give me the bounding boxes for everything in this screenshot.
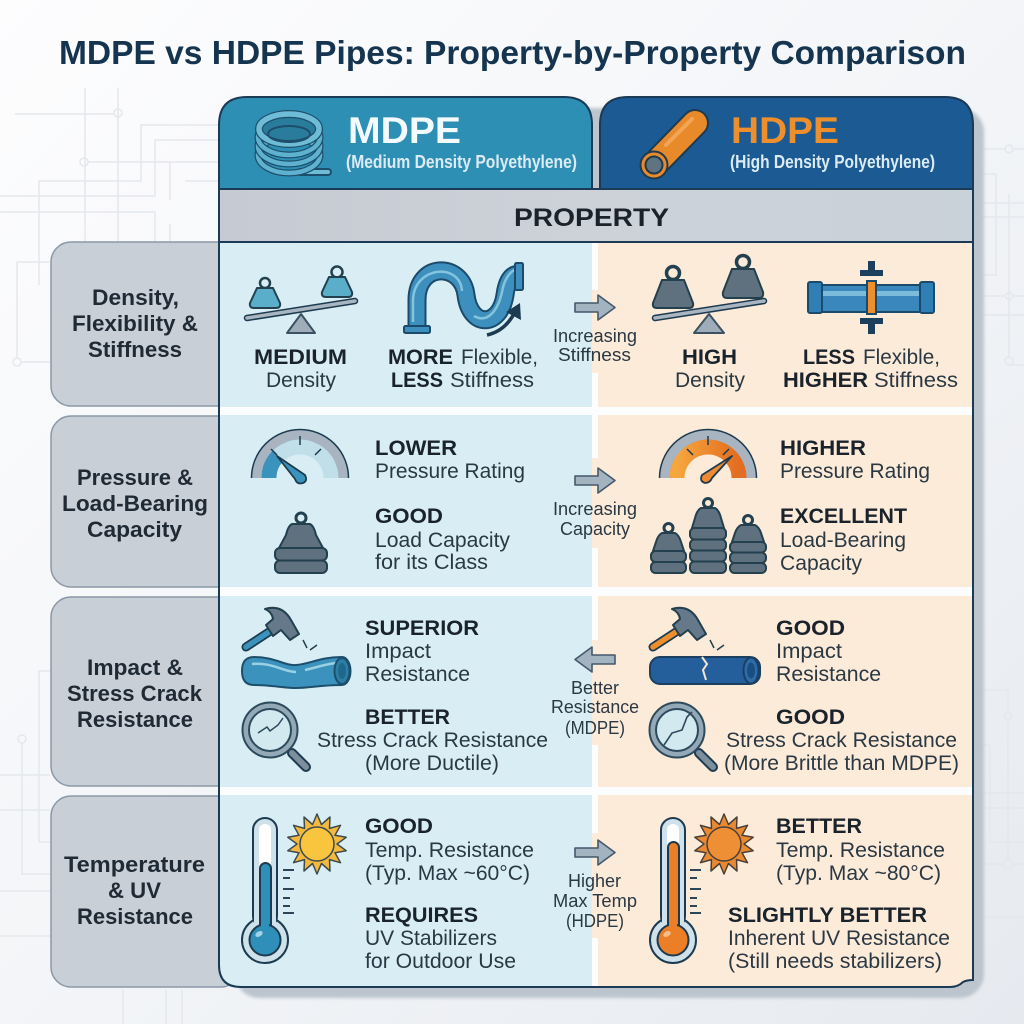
text: better stress crack resistance: (More Ductile) <box>365 752 499 775</box>
icon: coiled pipe <box>258 114 328 173</box>
row label: temperature and UV resistance: & UV <box>108 878 161 903</box>
arrow caption: Stiffness <box>558 345 631 365</box>
text: more flexible, less stiffness: Stiffness <box>450 369 534 392</box>
arrow caption: Resistance <box>551 697 639 717</box>
icon: hammer and cracked pipe <box>650 608 760 684</box>
icon: balance with heavy weights <box>653 256 764 333</box>
text: good stress crack resistance: Stress Crack Resistance <box>726 729 957 752</box>
icon: high pressure gauge <box>665 435 751 483</box>
text: good load capacity: GOOD <box>375 505 443 528</box>
icon: hammer and bent pipe <box>242 608 350 688</box>
text: less flexible, higher stiffness: Stiffness <box>874 369 958 392</box>
text: better temp resistance: Temp. Resistance <box>776 839 945 862</box>
icon: balance with light weights <box>247 266 355 333</box>
icon: magnifier over larger crack <box>650 702 713 767</box>
text: more flexible, less stiffness: MORE <box>388 346 453 369</box>
arrow caption: Capacity <box>560 519 630 539</box>
table body cells <box>219 243 973 987</box>
text: less flexible, higher stiffness: Flexible, <box>863 346 940 369</box>
row label: impact and stress crack resistance: Resistance <box>77 707 193 732</box>
header: MDPE <box>219 97 592 189</box>
text: good impact resistance <box>776 617 881 686</box>
text: less flexible, higher stiffness: LESS <box>803 346 855 369</box>
row 2 MDPE: pressure and load <box>257 435 525 574</box>
text: superior impact resistance <box>365 617 479 686</box>
text: lower pressure rating: LOWER <box>375 437 457 460</box>
text: good temp resistance: (Typ. Max ~60°C) <box>365 862 530 885</box>
icon: single weight <box>275 513 327 573</box>
text: slightly better UV resistance: (Still needs stabilizers) <box>728 950 942 973</box>
text: good stress crack resistance <box>724 706 959 775</box>
row label: density, flexibility and stiffness: Stiffness <box>88 337 182 362</box>
text: higher pressure rating <box>780 437 930 483</box>
table outline <box>219 189 973 987</box>
icon: magnifier over crack <box>242 702 306 767</box>
text: excellent load-bearing capacity <box>780 505 907 575</box>
text: medium density <box>254 346 347 392</box>
text: lower pressure rating: Pressure Rating <box>375 460 525 483</box>
text: requires UV stabilizers <box>365 904 516 973</box>
text: good stress crack resistance: (More Brittle than MDPE) <box>724 752 959 775</box>
text: better stress crack resistance: Stress Crack Resistance <box>317 729 548 752</box>
icon: low pressure gauge <box>257 435 343 484</box>
text: excellent load-bearing capacity: Load-Bearing <box>780 529 906 552</box>
text: slightly better UV resistance: Inherent UV Resistance <box>728 927 950 950</box>
text: medium density: Density <box>266 369 336 392</box>
arrow right <box>575 295 615 320</box>
arrow right <box>575 468 615 493</box>
comparison table <box>219 97 973 987</box>
row 4 HDPE: temperature and UV <box>650 814 950 973</box>
text: high density <box>675 346 745 392</box>
text: slightly better UV resistance <box>728 904 950 973</box>
row label: temperature and UV resistance <box>51 796 241 987</box>
row label: density, flexibility and stiffness: Flexibility & <box>72 311 198 336</box>
row 1 MDPE: medium density <box>247 263 538 392</box>
text: less flexible, higher stiffness: HIGHER <box>783 369 868 392</box>
text: lower pressure rating <box>375 437 525 483</box>
text: better temp resistance: (Typ. Max ~80°C) <box>776 862 941 885</box>
text: better stress crack resistance <box>317 706 548 775</box>
text: better stress crack resistance: BETTER <box>365 706 450 729</box>
arrow caption: Max Temp <box>553 891 637 911</box>
text: good impact resistance: GOOD <box>776 617 845 640</box>
row 3 center: better resistance <box>551 647 639 738</box>
text: better temp resistance <box>776 815 945 885</box>
arrow caption <box>551 678 639 738</box>
arrow caption <box>553 499 637 539</box>
text: requires UV stabilizers: REQUIRES <box>365 904 478 927</box>
row label: impact and stress crack resistance <box>51 597 241 786</box>
row label: pressure and load-bearing capacity <box>51 416 241 587</box>
property band <box>219 189 973 242</box>
arrow caption <box>553 326 637 365</box>
text: medium density: MEDIUM <box>254 346 347 369</box>
row 1 HDPE: high density <box>653 256 958 392</box>
arrow left <box>575 647 615 672</box>
arrow caption: Better <box>571 678 619 698</box>
HDPE name: HDPE <box>731 110 839 151</box>
MDPE name: MDPE <box>348 110 461 151</box>
row label: pressure and load-bearing capacity: Capacity <box>87 517 183 542</box>
row 4 center: higher max temp <box>553 840 637 931</box>
arrow caption: Increasing <box>553 499 637 519</box>
text: slightly better UV resistance: SLIGHTLY BETTER <box>728 904 927 927</box>
text: superior impact resistance: SUPERIOR <box>365 617 479 640</box>
text: high density: Density <box>675 369 745 392</box>
title: MDPE vs HDPE Pipes: Property-by-Property Comparison <box>59 34 966 71</box>
arrow caption: Higher <box>568 871 621 891</box>
text: more flexible, less stiffness: LESS <box>391 369 443 392</box>
row label: pressure and load-bearing capacity: Pressure & <box>77 465 193 490</box>
text: higher pressure rating: HIGHER <box>780 437 866 460</box>
row label: temperature and UV resistance: Temperature <box>64 852 205 877</box>
text: good temp resistance <box>365 815 534 885</box>
text: requires UV stabilizers: for Outdoor Use <box>365 950 516 973</box>
text: requires UV stabilizers: UV Stabilizers <box>365 927 497 950</box>
icon: flexible S-bend pipe <box>404 263 523 335</box>
icon: thermometer medium <box>242 818 294 963</box>
text: good load capacity <box>375 505 510 574</box>
text: superior impact resistance: Resistance <box>365 663 470 686</box>
text: better temp resistance: BETTER <box>776 815 862 838</box>
icon: rigid straight pipe with clamp <box>808 261 934 334</box>
text: good temp resistance: GOOD <box>365 815 433 838</box>
row label: impact and stress crack resistance: Stress Crack <box>67 681 203 706</box>
text: good temp resistance: Temp. Resistance <box>365 839 534 862</box>
text: less flexible, higher stiffness <box>783 346 958 392</box>
arrow caption: Increasing <box>553 326 637 346</box>
icon: yellow sun <box>288 814 346 874</box>
HDPE full name: (High Density Polyethylene) <box>730 152 935 172</box>
MDPE full name: (Medium Density Polyethylene) <box>346 152 577 172</box>
row label: impact and stress crack resistance: Impact & <box>87 655 183 680</box>
row 3 MDPE: impact and stress crack <box>242 608 548 775</box>
text: good impact resistance: Impact <box>776 640 842 663</box>
panel drop shadow <box>235 108 984 998</box>
row 2 center: increasing capacity <box>553 468 637 539</box>
text: superior impact resistance: Impact <box>365 640 431 663</box>
row label: pressure and load-bearing capacity: Load-Bearing <box>62 491 208 516</box>
text: good impact resistance: Resistance <box>776 663 881 686</box>
arrow right <box>575 840 615 865</box>
row 4 MDPE: temperature and UV <box>242 814 534 973</box>
text: high density: HIGH <box>682 346 737 369</box>
text: higher pressure rating: Pressure Rating <box>780 460 930 483</box>
row label: density, flexibility and stiffness <box>51 242 241 406</box>
icon: three stacked weights <box>651 498 766 573</box>
row label: temperature and UV resistance: Resistance <box>77 904 193 929</box>
row 3 HDPE: impact and stress crack <box>650 608 959 775</box>
text: good stress crack resistance: GOOD <box>776 706 845 729</box>
arrow caption <box>553 871 637 931</box>
text: more flexible, less stiffness <box>388 346 538 392</box>
text: good load capacity: Load Capacity <box>375 529 510 552</box>
arrow caption: (HDPE) <box>566 911 624 931</box>
row 2 HDPE: pressure and load <box>651 435 930 575</box>
property band: PROPERTY <box>514 204 669 232</box>
text: good load capacity: for its Class <box>375 551 488 574</box>
row label: density, flexibility and stiffness: Density, <box>92 285 179 310</box>
icon: orange sun <box>695 814 753 874</box>
icon: thermometer high <box>650 818 701 963</box>
text: excellent load-bearing capacity: Capacity <box>780 552 863 575</box>
arrow caption: (MDPE) <box>565 718 625 738</box>
text: more flexible, less stiffness: Flexible, <box>461 346 538 369</box>
row 1 center: increasing stiffness <box>553 295 637 365</box>
icon: rigid orange pipe <box>640 119 695 178</box>
header: HDPE <box>600 97 973 189</box>
text: excellent load-bearing capacity: EXCELLENT <box>780 505 907 528</box>
